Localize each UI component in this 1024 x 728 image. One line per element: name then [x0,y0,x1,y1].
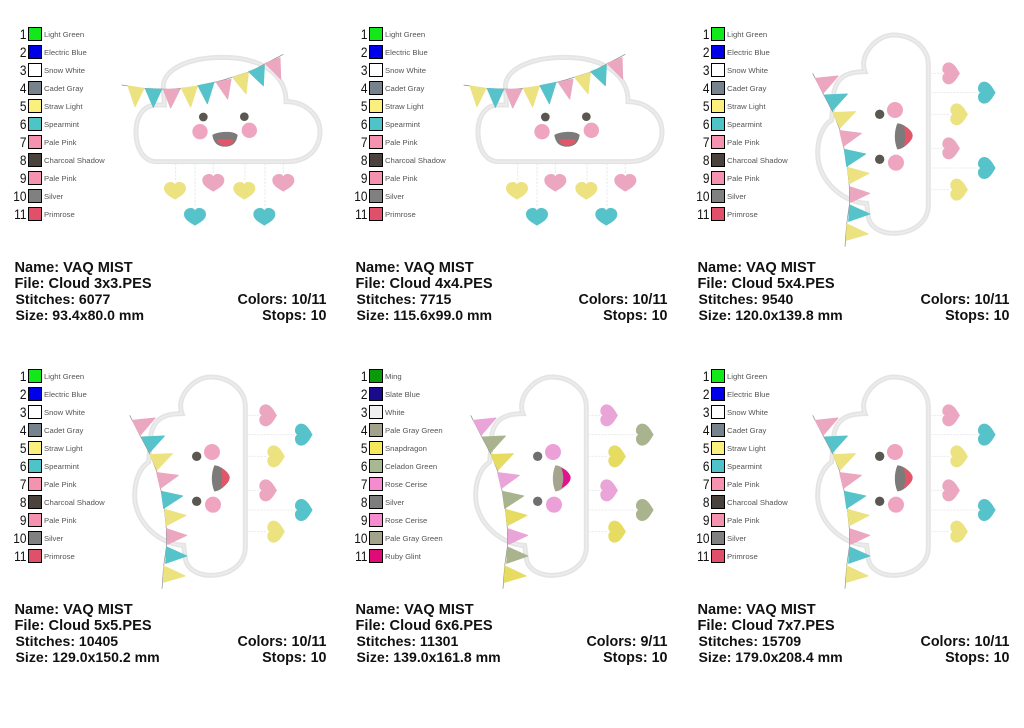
colour legend [13,368,105,564]
panel: Cloud 7x7 [696,368,1010,666]
design details: Stops: 10 [262,650,327,666]
colour legend: Light Green [44,30,84,39]
colour legend: 2 [20,44,27,60]
colour legend: 4 [361,80,368,96]
illustration: cloud with horizontal bunting [464,54,662,226]
illustration: cloud with vertical bunting [471,377,654,589]
design details [698,260,1010,324]
panel: Cloud 5x5 [13,368,327,666]
colour legend: Primrose [727,552,758,561]
design details [356,602,668,666]
colour legend: Silver [385,192,405,201]
design details: Name: VAQ MIST [14,602,133,618]
design details: Size: 179.0x208.4 mm [698,649,843,665]
design details: Colors: 10/11 [578,292,668,308]
design details: File: Cloud 5x4.PES [698,276,835,292]
colour legend: 2 [361,386,368,402]
colour legend: 7 [703,476,710,492]
colour legend: Pale Pink [727,516,760,525]
colour legend: Pale Pink [44,174,77,183]
hanging hearts [588,404,654,543]
colour legend: Celadon Green [385,462,437,471]
colour legend: 3 [703,404,710,420]
colour legend: Cadet Gray [44,426,83,435]
colour legend: 4 [20,80,27,96]
colour legend: Electric Blue [44,48,87,57]
colour legend: Snow White [727,66,768,75]
colour legend: 10 [13,530,27,546]
colour legend: Snow White [385,66,426,75]
bunting flags [471,415,528,589]
colour legend: 5 [20,440,27,456]
colour legend: 5 [361,98,368,114]
colour legend: 8 [361,152,368,168]
colour legend: Spearmint [385,120,421,129]
design details: Size: 115.6x99.0 mm [356,307,492,323]
colour legend: Cadet Gray [727,426,766,435]
colour legend: Silver [727,534,747,543]
colour legend: Light Green [727,372,767,381]
colour legend: Silver [385,498,405,507]
colour legend: 4 [703,422,710,438]
colour legend: 8 [20,152,27,168]
colour legend: Pale Gray Green [385,534,443,543]
colour legend: Ming [385,372,402,381]
colour legend: 9 [703,170,710,186]
bunting flags [813,73,870,247]
colour legend: Straw Light [44,444,83,453]
colour legend: Snow White [44,66,85,75]
colour legend: 11 [14,206,27,222]
panel: Cloud 3x3 [13,26,327,324]
design details: Stitches: 15709 [698,633,801,649]
cloud face [533,444,571,513]
design details: Colors: 10/11 [920,292,1010,308]
colour legend: Snow White [44,408,85,417]
bunting flags [122,54,283,108]
colour legend: Rose Cerise [385,480,427,489]
colour legend: 7 [20,134,27,150]
bunting flags [464,54,625,108]
colour legend: Pale Pink [727,174,760,183]
cloud face [534,112,599,147]
design details: Stitches: 11301 [356,633,459,649]
colour legend: 2 [703,44,710,60]
cloud face [875,102,913,171]
design details: Stitches: 6077 [16,291,110,307]
colour legend: 1 [703,26,710,42]
design details: Name: VAQ MIST [14,260,133,276]
colour legend: 9 [703,512,710,528]
colour legend: 3 [361,404,368,420]
design details: File: Cloud 5x5.PES [14,618,152,634]
colour legend: 8 [703,152,710,168]
panel: Cloud 4x4 [354,26,668,324]
colour legend: 6 [20,458,27,474]
colour legend: Silver [44,192,64,201]
colour legend: 4 [703,80,710,96]
colour legend: Spearmint [727,462,763,471]
design details: Stops: 10 [945,650,1010,666]
colour legend: 5 [703,98,710,114]
colour legend: Pale Pink [385,138,418,147]
design details: Stops: 10 [945,308,1010,324]
colour legend: Charcoal Shadow [44,498,105,507]
colour legend: Rose Cerise [385,516,427,525]
colour legend: Pale Pink [44,138,77,147]
colour legend: 11 [697,548,710,564]
cloud face [192,444,230,513]
colour legend: 7 [361,134,368,150]
design details: Name: VAQ MIST [356,260,474,276]
colour legend: Primrose [44,210,75,219]
design details: Colors: 10/11 [920,634,1010,650]
hanging hearts [164,163,294,226]
cloud outline [818,35,928,233]
design details: Size: 93.4x80.0 mm [16,307,144,323]
colour legend: Straw Light [727,444,766,453]
colour legend: Primrose [385,210,416,219]
colour legend: 1 [20,26,27,42]
hanging hearts [930,62,996,201]
colour legend: 6 [703,458,710,474]
design details: Colors: 10/11 [238,634,327,650]
colour legend: 2 [20,386,27,402]
design details [698,602,1010,666]
design details: Name: VAQ MIST [356,602,474,618]
design details: Size: 129.0x150.2 mm [16,649,160,665]
colour legend [13,26,105,222]
colour legend: Pale Pink [727,138,760,147]
design details: Size: 139.0x161.8 mm [356,649,501,665]
colour legend: 9 [20,170,27,186]
illustration: cloud with vertical bunting [813,377,996,589]
colour legend: 9 [20,512,27,528]
colour legend: Pale Pink [727,480,760,489]
colour legend: 11 [355,548,368,564]
colour legend: 2 [361,44,368,60]
colour legend: 2 [703,386,710,402]
design details: Stops: 10 [262,308,327,324]
colour legend: 10 [354,530,368,546]
colour legend: 10 [696,530,710,546]
cloud outline [478,57,662,162]
design details: File: Cloud 4x4.PES [356,276,493,292]
design details: Name: VAQ MIST [698,602,816,618]
colour legend: 1 [20,368,27,384]
colour legend: Spearmint [727,120,763,129]
colour legend: Primrose [44,552,75,561]
colour legend: Silver [727,192,747,201]
colour legend: 5 [703,440,710,456]
design details: Name: VAQ MIST [698,260,816,276]
cloud face [192,112,257,147]
illustration: cloud with vertical bunting [813,35,996,247]
hanging hearts [930,404,996,543]
panel: Cloud 5x4 [696,26,1010,324]
colour legend: 10 [696,188,710,204]
colour legend: 4 [361,422,368,438]
colour legend: 6 [361,458,368,474]
illustration: cloud with vertical bunting [130,377,313,589]
design details [14,260,327,324]
colour legend: 9 [361,512,368,528]
colour legend: 11 [355,206,368,222]
colour legend: 5 [361,440,368,456]
cloud outline [476,377,586,575]
colour legend: 1 [703,368,710,384]
cloud face [875,444,913,513]
colour legend: Cadet Gray [44,84,83,93]
colour legend: 10 [13,188,27,204]
colour legend: Straw Light [727,102,766,111]
colour legend [354,368,443,564]
colour legend: 11 [14,548,27,564]
colour legend: Charcoal Shadow [44,156,105,165]
colour legend: Charcoal Shadow [727,498,788,507]
cloud outline [135,377,245,575]
colour legend: 10 [354,188,368,204]
design details [356,260,668,324]
colour legend: Charcoal Shadow [727,156,788,165]
colour legend: Light Green [44,372,84,381]
colour legend: 1 [361,368,368,384]
colour legend: Snapdragon [385,444,427,453]
bunting flags [813,415,870,589]
colour legend: Straw Light [44,102,83,111]
colour legend: Spearmint [44,462,80,471]
colour legend [696,26,788,222]
cloud outline [818,377,928,575]
colour legend: Electric Blue [727,48,770,57]
colour legend: White [385,408,405,417]
design details: Stops: 10 [603,650,668,666]
design details: Stops: 10 [603,308,668,324]
hanging hearts [247,404,313,543]
colour legend: 9 [361,170,368,186]
design details: Stitches: 10405 [16,633,118,649]
colour legend: Pale Pink [44,516,77,525]
colour legend: 8 [20,494,27,510]
colour legend [696,368,788,564]
colour legend: 8 [361,494,368,510]
colour legend: 3 [20,62,27,78]
colour legend: Slate Blue [385,390,420,399]
colour legend: 3 [361,62,368,78]
colour legend: 6 [703,116,710,132]
colour legend: 5 [20,98,27,114]
colour legend: Electric Blue [727,390,770,399]
colour legend: 6 [20,116,27,132]
colour legend: Pale Pink [385,174,418,183]
colour legend: Straw Light [385,102,424,111]
colour legend: Light Green [385,30,425,39]
colour legend: 3 [20,404,27,420]
design details: Stitches: 9540 [698,291,793,307]
design details: Colors: 9/11 [586,634,668,650]
cloud outline [136,57,320,162]
design details: Size: 120.0x139.8 mm [698,307,843,323]
colour legend: 11 [697,206,710,222]
illustration: cloud with horizontal bunting [122,54,320,226]
colour legend: Snow White [727,408,768,417]
colour legend [354,26,446,222]
colour legend: 6 [361,116,368,132]
design details: File: Cloud 3x3.PES [14,276,152,292]
colour legend: 7 [20,476,27,492]
colour legend: 7 [703,134,710,150]
colour legend: Pale Pink [44,480,77,489]
design details: Stitches: 7715 [356,291,451,307]
colour legend: Silver [44,534,64,543]
colour legend: Ruby Glint [385,552,422,561]
colour legend: Pale Gray Green [385,426,443,435]
colour legend: Light Green [727,30,767,39]
hanging hearts [506,163,636,226]
colour legend: Cadet Gray [727,84,766,93]
colour legend: Primrose [727,210,758,219]
panel: Cloud 6x6 [354,368,668,666]
colour legend: 8 [703,494,710,510]
colour legend: Spearmint [44,120,80,129]
design details: File: Cloud 7x7.PES [698,618,835,634]
bunting flags [130,415,187,589]
colour legend: 7 [361,476,368,492]
colour legend: 3 [703,62,710,78]
design details [14,602,327,666]
design details: File: Cloud 6x6.PES [356,618,493,634]
colour legend: Electric Blue [44,390,87,399]
colour legend: Cadet Gray [385,84,424,93]
colour legend: 4 [20,422,27,438]
colour legend: Electric Blue [385,48,428,57]
design details: Colors: 10/11 [238,292,327,308]
colour legend: 1 [361,26,368,42]
colour legend: Charcoal Shadow [385,156,446,165]
